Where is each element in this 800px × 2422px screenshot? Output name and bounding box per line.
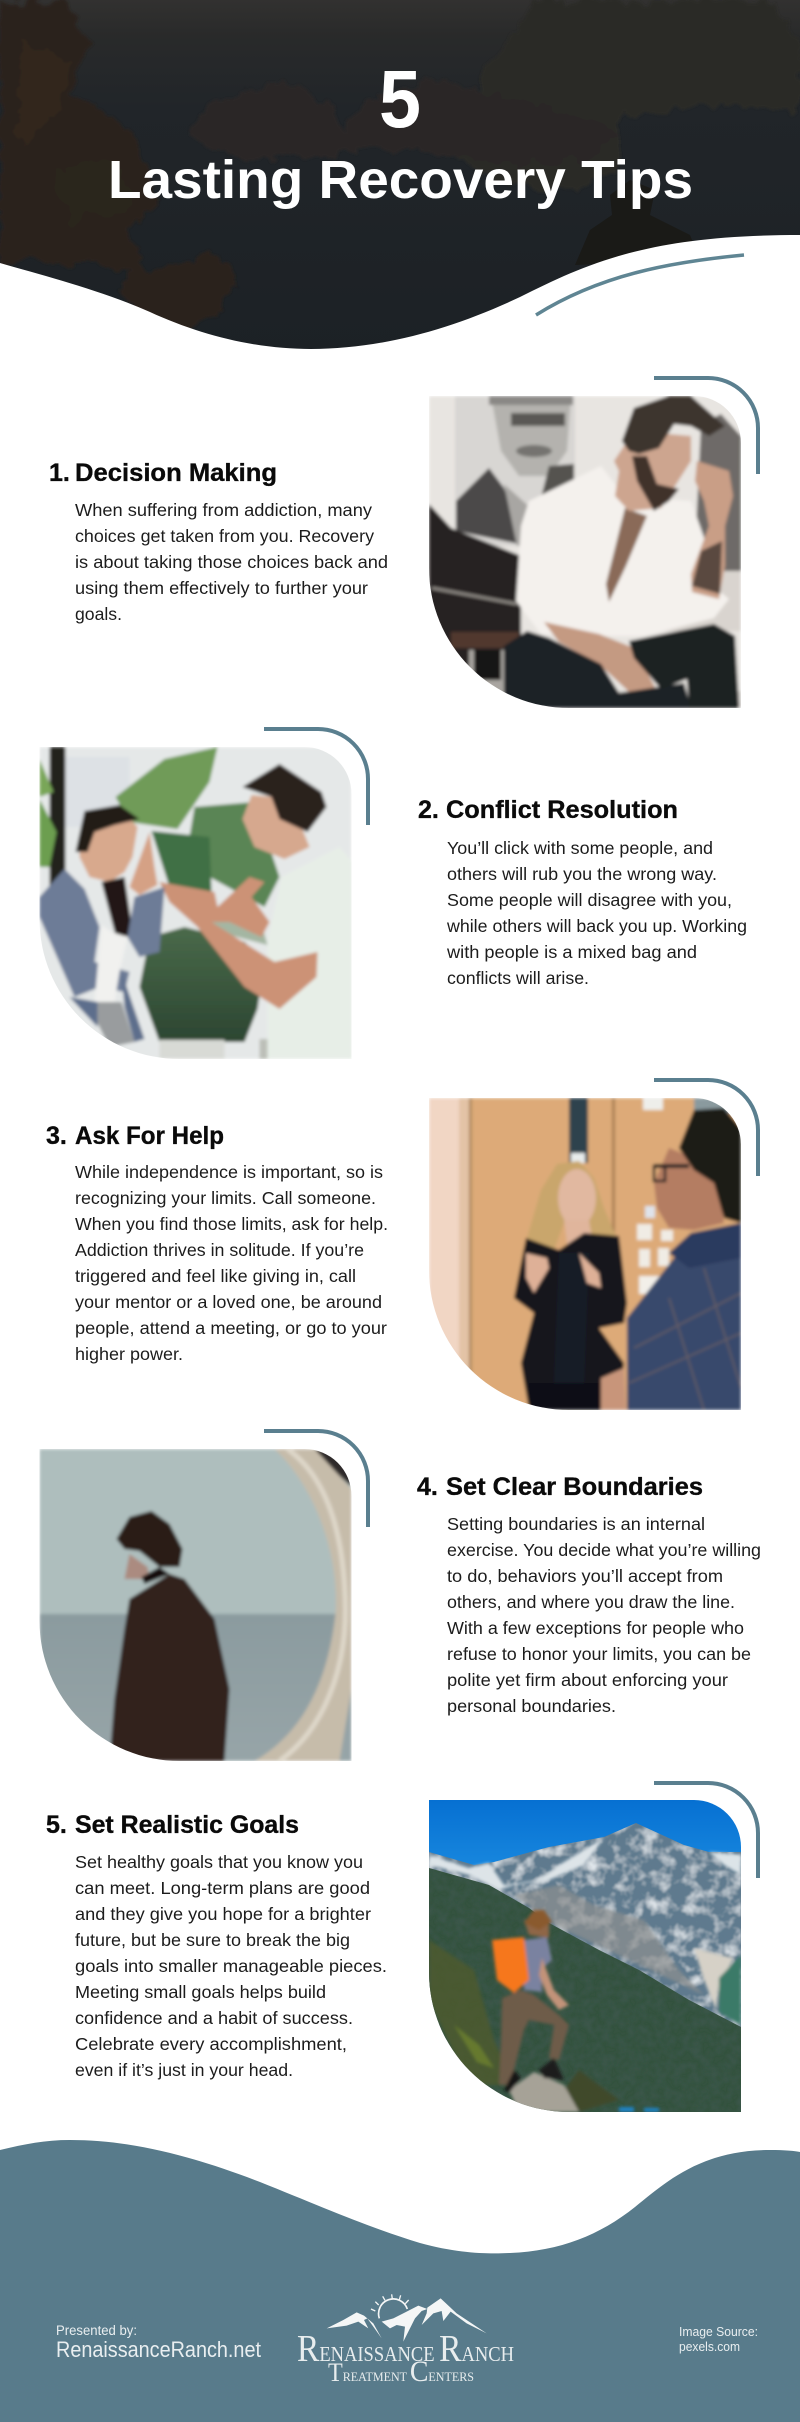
tip 5 heading: Set Realistic Goals [75, 1811, 299, 1839]
tip 3 body text: When you find those limits, ask for help. [75, 1214, 388, 1234]
tip 3 body text: recognizing your limits. Call someone. [75, 1188, 376, 1208]
tip 3 body text [75, 1162, 388, 1364]
tip 5 body text: confidence and a habit of success. [75, 2008, 353, 2028]
tip 4 body text [447, 1514, 761, 1716]
panel: tip 1 decision making [49, 378, 758, 710]
tip 3 body text: triggered and feel like giving in, call [75, 1266, 356, 1286]
tip 1 heading: 1. [49, 459, 70, 487]
image source text [679, 2325, 758, 2354]
header photo background [0, 0, 800, 360]
tip 1 body text [75, 500, 388, 624]
title: 5 [379, 54, 421, 145]
tip 2 body text: with people is a mixed bag and [446, 942, 697, 962]
tip 2 body text [446, 838, 747, 988]
title: Lasting Recovery Tips [108, 150, 693, 210]
tip 2 body text: conflicts will arise. [447, 968, 589, 988]
tip 4 body text: Setting boundaries is an internal [447, 1514, 705, 1534]
footer wave band [0, 2140, 800, 2422]
image source text: Image Source: [679, 2325, 758, 2339]
tip 3 body text: Addiction thrives in solitude. If you’re [75, 1240, 364, 1260]
logo: Renaissance Ranch Treatment Centers [297, 2294, 514, 2388]
panel: tip 4 set clear boundaries [40, 1431, 761, 1761]
tip 4 body text: exercise. You decide what you’re willing [447, 1540, 761, 1560]
tip 5 body text: Meeting small goals helps build [75, 1982, 326, 2002]
tip 4 body text: With a few exceptions for people who [447, 1618, 744, 1638]
tip 4 body text: personal boundaries. [447, 1696, 616, 1716]
title [108, 54, 693, 210]
image source text: pexels.com [679, 2340, 740, 2354]
tip 5 body text: and they give you hope for a brighter [75, 1904, 371, 1924]
tip 3 heading: Ask For Help [75, 1122, 224, 1150]
tip 1 body text: is about taking those choices back and [75, 552, 388, 572]
tip 2 body text: others will rub you the wrong way. [447, 864, 717, 884]
presented by text: Presented by: [56, 2323, 137, 2338]
tip 4 body text: others, and where you draw the line. [447, 1592, 735, 1612]
tip 1 accent arc [654, 378, 758, 474]
tip 3 body text: higher power. [75, 1344, 183, 1364]
tip 2 body text: while others will back you up. Working [446, 916, 747, 936]
tip 3 body text: people, attend a meeting, or go to your [75, 1318, 387, 1338]
tip 1 body text: choices get taken from you. Recovery [75, 526, 374, 546]
tip 5 body text: even if it’s just in your head. [75, 2060, 293, 2080]
tip 2 heading: Conflict Resolution [446, 796, 678, 824]
panel: tip 2 conflict resolution [40, 729, 747, 1059]
logo wordmark line 2: TREATMENT CENTERS [328, 2355, 474, 2388]
accent wave line [536, 255, 744, 315]
tip 2 accent arc [264, 729, 368, 825]
tip 4 photo: person on beach seen in mirror [40, 1449, 352, 1761]
tip 3 accent arc [654, 1080, 758, 1176]
logo wordmark line 1: RENAISSANCE RANCH [297, 2328, 514, 2370]
tip 3 heading: 3. [46, 1122, 67, 1150]
tip 2 heading: 2. [418, 796, 439, 824]
presented by text: RenaissanceRanch.net [56, 2337, 261, 2362]
tip 5 body text: goals into smaller manageable pieces. [75, 1956, 387, 1976]
tip 1 heading: Decision Making [75, 459, 277, 487]
tip 4 body text: to do, behaviors you’ll accept from [447, 1566, 723, 1586]
tip 1 photo: man sitting with hand on forehead [429, 396, 741, 710]
tip 4 body text: polite yet firm about enforcing your [447, 1670, 728, 1690]
icon: mountains and sun [327, 2294, 487, 2342]
tip 5 photo: hiker looking at snowy mountain [429, 1800, 741, 2112]
tip 1 body text: using them effectively to further your [75, 578, 368, 598]
tip 1 body text: When suffering from addiction, many [75, 500, 372, 520]
panel: tip 3 ask for help [46, 1080, 758, 1410]
silhouette of person [575, 180, 700, 265]
tip 2 body text: You’ll click with some people, and [447, 838, 713, 858]
tip 1 body text: goals. [75, 604, 122, 624]
tip 4 accent arc [264, 1431, 368, 1527]
tip 4 body text: refuse to honor your limits, you can be [447, 1644, 751, 1664]
tip 4 heading: Set Clear Boundaries [446, 1473, 703, 1501]
tip 5 heading: 5. [46, 1811, 67, 1839]
tip 5 body text [75, 1852, 387, 2080]
tip 2 photo: couple arguing among plants [40, 747, 352, 1059]
tip 5 accent arc [654, 1783, 758, 1878]
tip 5 body text: can meet. Long-term plans are good [75, 1878, 370, 1898]
panel: tip 5 set realistic goals [46, 1783, 758, 2112]
tip 3 body text: your mentor or a loved one, be around [75, 1292, 382, 1312]
presented by text [56, 2323, 261, 2362]
tip 5 body text: future, but be sure to break the big [75, 1930, 350, 1950]
tip 5 body text: Set healthy goals that you know you [75, 1852, 363, 1872]
tip 3 photo: woman talking to man in office [429, 1098, 741, 1410]
tip 4 heading: 4. [417, 1473, 438, 1501]
tip 3 body text: While independence is important, so is [75, 1162, 383, 1182]
tip 2 body text: Some people will disagree with you, [447, 890, 732, 910]
tip 5 body text: Celebrate every accomplishment, [75, 2034, 347, 2054]
